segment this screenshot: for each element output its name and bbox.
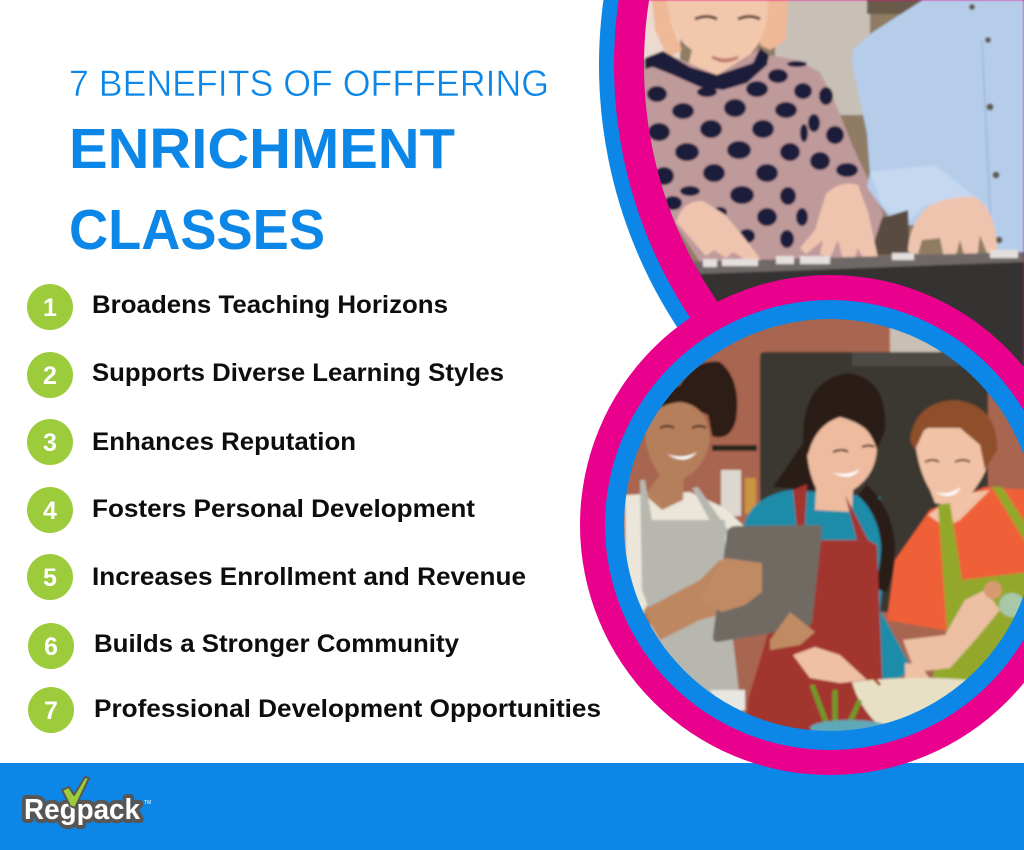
woman left: white sweater: [625, 492, 748, 620]
item 7: [28, 687, 601, 733]
woman right: face: [915, 424, 988, 507]
boy shirt: [852, 0, 1024, 255]
polka dots: [647, 61, 858, 248]
woman middle: neck and face: [807, 417, 877, 512]
item 7: Professional Development Opportunities: [94, 695, 601, 723]
item 5: 5: [43, 564, 57, 592]
item 4: Fosters Personal Development: [92, 495, 476, 523]
title line 1: 7 BENEFITS OF OFFFERING: [69, 63, 549, 104]
item 3: [27, 419, 356, 465]
girl hand 1: [676, 201, 761, 265]
item 2: Supports Diverse Learning Styles: [92, 359, 504, 387]
woman middle: left hair: [774, 443, 814, 490]
dark gap between children: [870, 210, 910, 255]
item 3: Enhances Reputation: [92, 428, 356, 456]
woman right: green apron: [932, 502, 1024, 680]
benefits list: [27, 284, 601, 733]
girl hand 2: [800, 184, 878, 264]
ring: blue outer: [599, 0, 1024, 544]
item 4: 4: [43, 497, 57, 525]
logo wordmark: Regpack: [24, 794, 141, 826]
shelf bottles: [721, 470, 741, 516]
item 1: [27, 284, 448, 330]
woman left: arm: [642, 559, 724, 640]
photo: three women with tablet: [620, 315, 1024, 740]
ring: blue inner: [605, 300, 1024, 750]
icon: check mark: [62, 777, 89, 808]
item 6: Builds a Stronger Community: [94, 630, 459, 658]
ring: pink inner: [614, 0, 1024, 523]
item 1: 1: [43, 294, 57, 322]
ring: pink outer: [580, 275, 1024, 775]
shirt buttons: [969, 4, 1002, 244]
woman middle: hair: [803, 373, 885, 455]
dark fridge: [760, 352, 988, 612]
photo circle: children at keyboard: [599, 0, 1024, 368]
woman left: hair: [648, 361, 737, 437]
item 5: Increases Enrollment and Revenue: [92, 563, 526, 591]
woman right: hair: [910, 400, 997, 470]
keyboard body: [697, 260, 1024, 368]
item 4: [27, 487, 476, 533]
item 3: 3: [43, 429, 57, 457]
tablet: [713, 525, 822, 642]
woman left: fingers on tablet: [716, 556, 764, 613]
trademark: TM: [144, 800, 151, 806]
woman left: face: [645, 402, 710, 510]
item 6: 6: [44, 633, 58, 661]
girl hair: [652, 0, 788, 58]
title: [69, 63, 549, 262]
woman middle: braid: [862, 490, 888, 590]
photo: children playing keyboard: [630, 0, 1024, 380]
keyboard keys: [703, 250, 1018, 267]
title line 3: CLASSES: [69, 198, 325, 262]
boy hand: [908, 197, 998, 258]
girl neck and face: [667, 0, 768, 76]
woman middle: red apron: [745, 484, 883, 740]
herbs and dish: [812, 685, 860, 722]
woman middle: teal top: [743, 490, 913, 680]
sweater collar: [645, 48, 769, 90]
brick wall: [620, 315, 1024, 735]
item 2: [27, 352, 504, 398]
woman left: apron and straps: [640, 480, 740, 700]
footer band: [0, 763, 1024, 850]
woman middle: hands: [793, 647, 867, 683]
photo circle: women cooking: [580, 275, 1024, 775]
woman right: forearm: [903, 590, 1000, 672]
woman right: orange top: [887, 487, 1024, 640]
logo: Regpack: [24, 777, 151, 826]
woman right: chest skin: [928, 490, 990, 527]
title line 2: ENRICHMENT: [69, 117, 455, 181]
item 1: Broadens Teaching Horizons: [92, 291, 448, 319]
mixing bowl: [852, 678, 968, 727]
item 5: [27, 554, 526, 600]
item 7: 7: [44, 697, 58, 725]
girl sweater: [640, 48, 883, 262]
item 6: [28, 623, 459, 669]
item 2: 2: [43, 362, 57, 390]
